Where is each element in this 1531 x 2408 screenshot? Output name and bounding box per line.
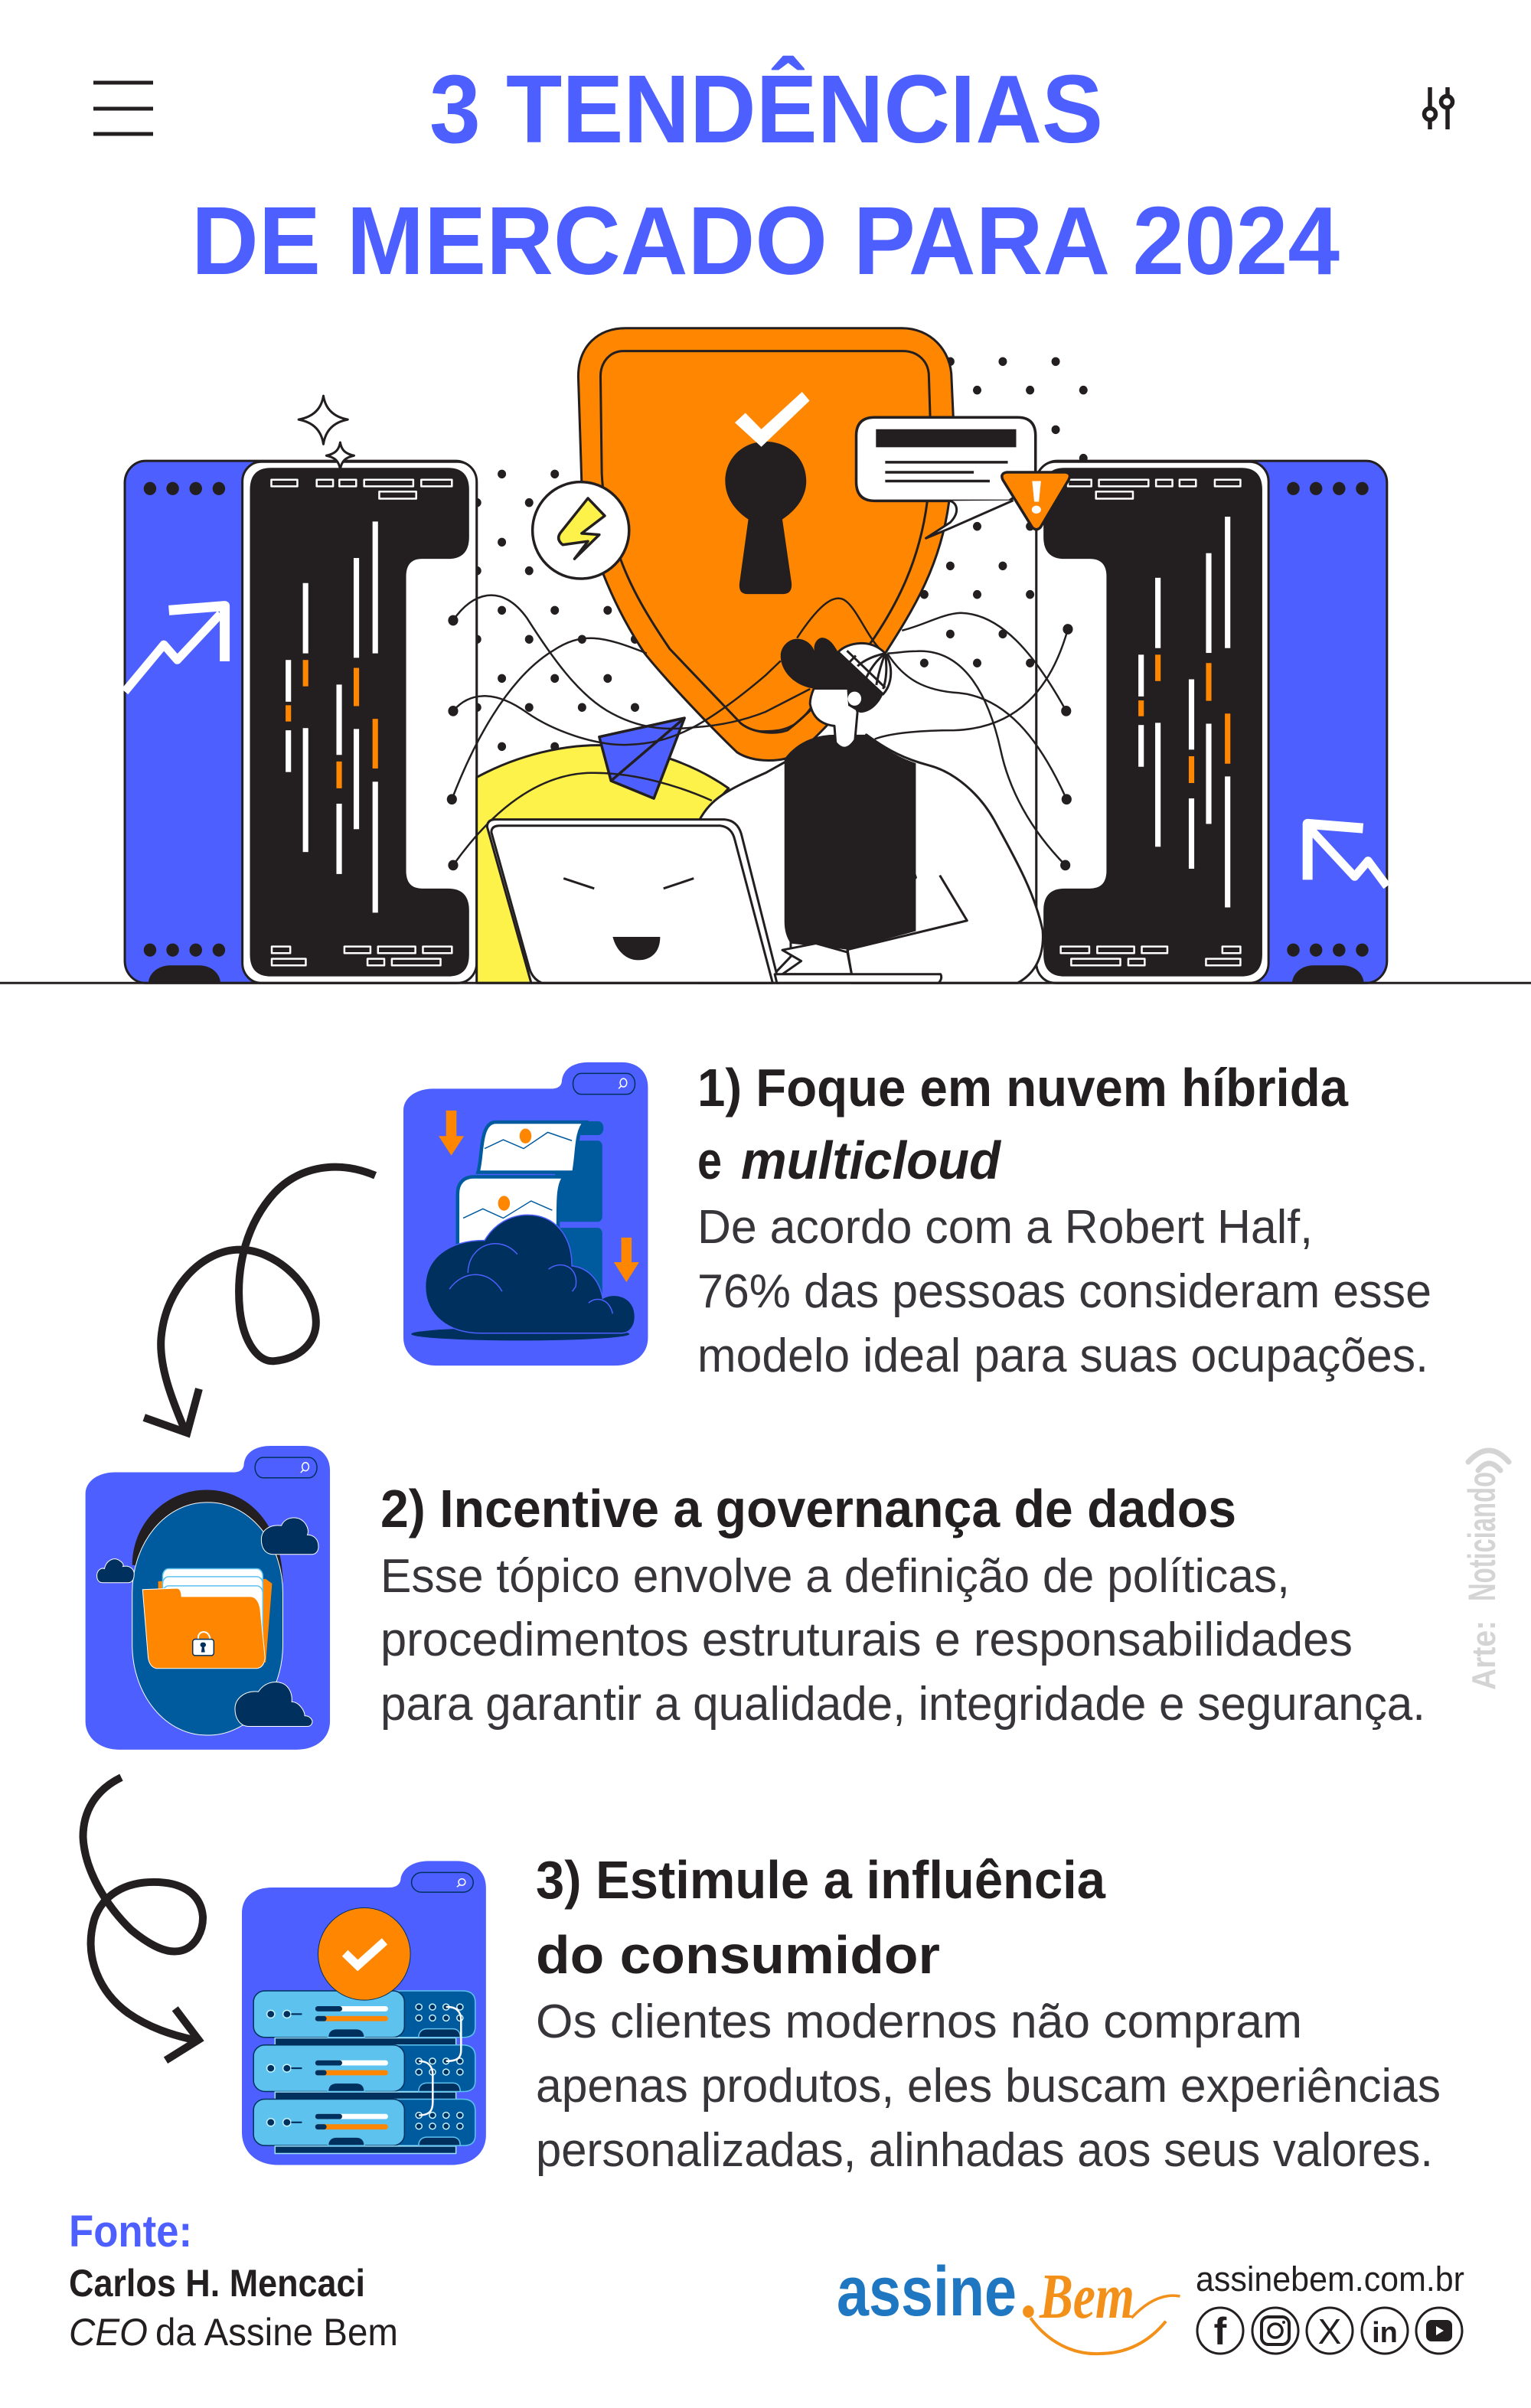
icon: sparkles bbox=[299, 396, 354, 470]
icon: secure folder bbox=[86, 1446, 330, 1750]
panel: item 3 heading and text: 3) Estimule a influência bbox=[536, 1850, 1106, 1910]
yellow arc background bbox=[477, 746, 729, 983]
network wires bbox=[447, 595, 1073, 870]
panel: item 3 heading and text: personalizadas, alinhadas aos seus valores. bbox=[536, 2124, 1433, 2177]
title: DE MERCADO PARA 2024 bbox=[191, 187, 1340, 295]
icon: linkedin bbox=[1362, 2308, 1408, 2354]
left server bbox=[125, 461, 477, 983]
ground line bbox=[0, 982, 1531, 984]
paper plane bbox=[599, 718, 684, 798]
watermark: Arte Noticiando: Noticiando bbox=[1461, 1472, 1503, 1601]
speech bubble with alert bbox=[857, 417, 1070, 538]
icon: hamburger menu bbox=[93, 83, 153, 134]
icons and arrows row 1-2 bbox=[86, 1062, 648, 1750]
source credit bbox=[69, 2207, 398, 2354]
icons and arrow row 3 bbox=[83, 1777, 486, 2165]
logo: Assine Bem: assine bbox=[837, 2253, 1017, 2331]
panel: item 1 heading and text: multicloud bbox=[741, 1131, 1001, 1190]
panel: item 3 heading and text bbox=[536, 1850, 1441, 2177]
source credit: CEO bbox=[69, 2311, 148, 2354]
panel: item 2 heading and text: procedimentos estruturais e responsabilidades bbox=[380, 1613, 1353, 1666]
panel: item 3 heading and text: Os clientes modernos não compram bbox=[536, 1995, 1302, 2048]
source credit: Fonte: bbox=[69, 2207, 192, 2256]
icon: facebook: f bbox=[1214, 2310, 1227, 2353]
hero illustration bbox=[0, 328, 1531, 983]
icon: linkedin: in bbox=[1372, 2317, 1398, 2349]
watermark: Arte Noticiando: Arte: bbox=[1465, 1620, 1503, 1690]
icon: facebook bbox=[1197, 2308, 1243, 2354]
person bbox=[699, 638, 1043, 983]
panel: item 1 heading and text: e bbox=[697, 1131, 722, 1190]
panel: item 1 heading and text bbox=[697, 1058, 1431, 1382]
website address: assinebem.com.br bbox=[1196, 2260, 1464, 2299]
source credit: da Assine Bem bbox=[155, 2311, 398, 2354]
arrow: curl to item 2 bbox=[144, 1167, 375, 1433]
social icons bbox=[1197, 2308, 1462, 2354]
logo: Assine Bem bbox=[837, 2253, 1180, 2354]
icon: cloud documents bbox=[403, 1062, 648, 1366]
laptop bbox=[487, 820, 942, 983]
panel: item 1 heading and text: 1) Foque em nuvem híbrida bbox=[697, 1058, 1349, 1118]
panel: item 1 heading and text: 76% das pessoas consideram esse bbox=[697, 1265, 1431, 1318]
icon: settings sliders bbox=[1424, 87, 1453, 129]
icon: X: X bbox=[1318, 2312, 1341, 2351]
panel: item 1 heading and text: modelo ideal para suas ocupações. bbox=[697, 1330, 1428, 1382]
title bbox=[191, 55, 1340, 295]
dot pattern bbox=[473, 357, 1088, 780]
arrow: curl to item 3 bbox=[83, 1777, 203, 2061]
panel: item 3 heading and text: do consumidor bbox=[536, 1925, 940, 1985]
title: 3 TENDÊNCIAS bbox=[429, 55, 1103, 163]
panel: item 2 heading and text bbox=[380, 1479, 1425, 1731]
logo: Assine Bem: Bem bbox=[1039, 2261, 1134, 2332]
panel: item 2 heading and text: Esse tópico envolve a definição de políticas, bbox=[380, 1550, 1290, 1603]
source credit: Carlos H. Mencaci bbox=[69, 2262, 365, 2305]
panel: item 2 heading and text: 2) Incentive a governança de dados bbox=[380, 1479, 1236, 1538]
icon: instagram bbox=[1252, 2308, 1298, 2354]
panel: item 3 heading and text: apenas produtos, eles buscam experiências bbox=[536, 2060, 1441, 2113]
panel: item 2 heading and text: para garantir a qualidade, integridade e segurança. bbox=[380, 1678, 1425, 1731]
icon: X bbox=[1307, 2308, 1353, 2354]
icon: youtube bbox=[1416, 2308, 1462, 2354]
shield with keyhole bbox=[578, 328, 953, 761]
right server bbox=[1036, 461, 1387, 983]
icon: lightning badge bbox=[533, 482, 629, 579]
panel: item 1 heading and text: De acordo com a Robert Half, bbox=[697, 1201, 1313, 1254]
watermark: Arte Noticiando bbox=[1461, 1450, 1509, 1690]
icon: server stack bbox=[242, 1861, 486, 2165]
